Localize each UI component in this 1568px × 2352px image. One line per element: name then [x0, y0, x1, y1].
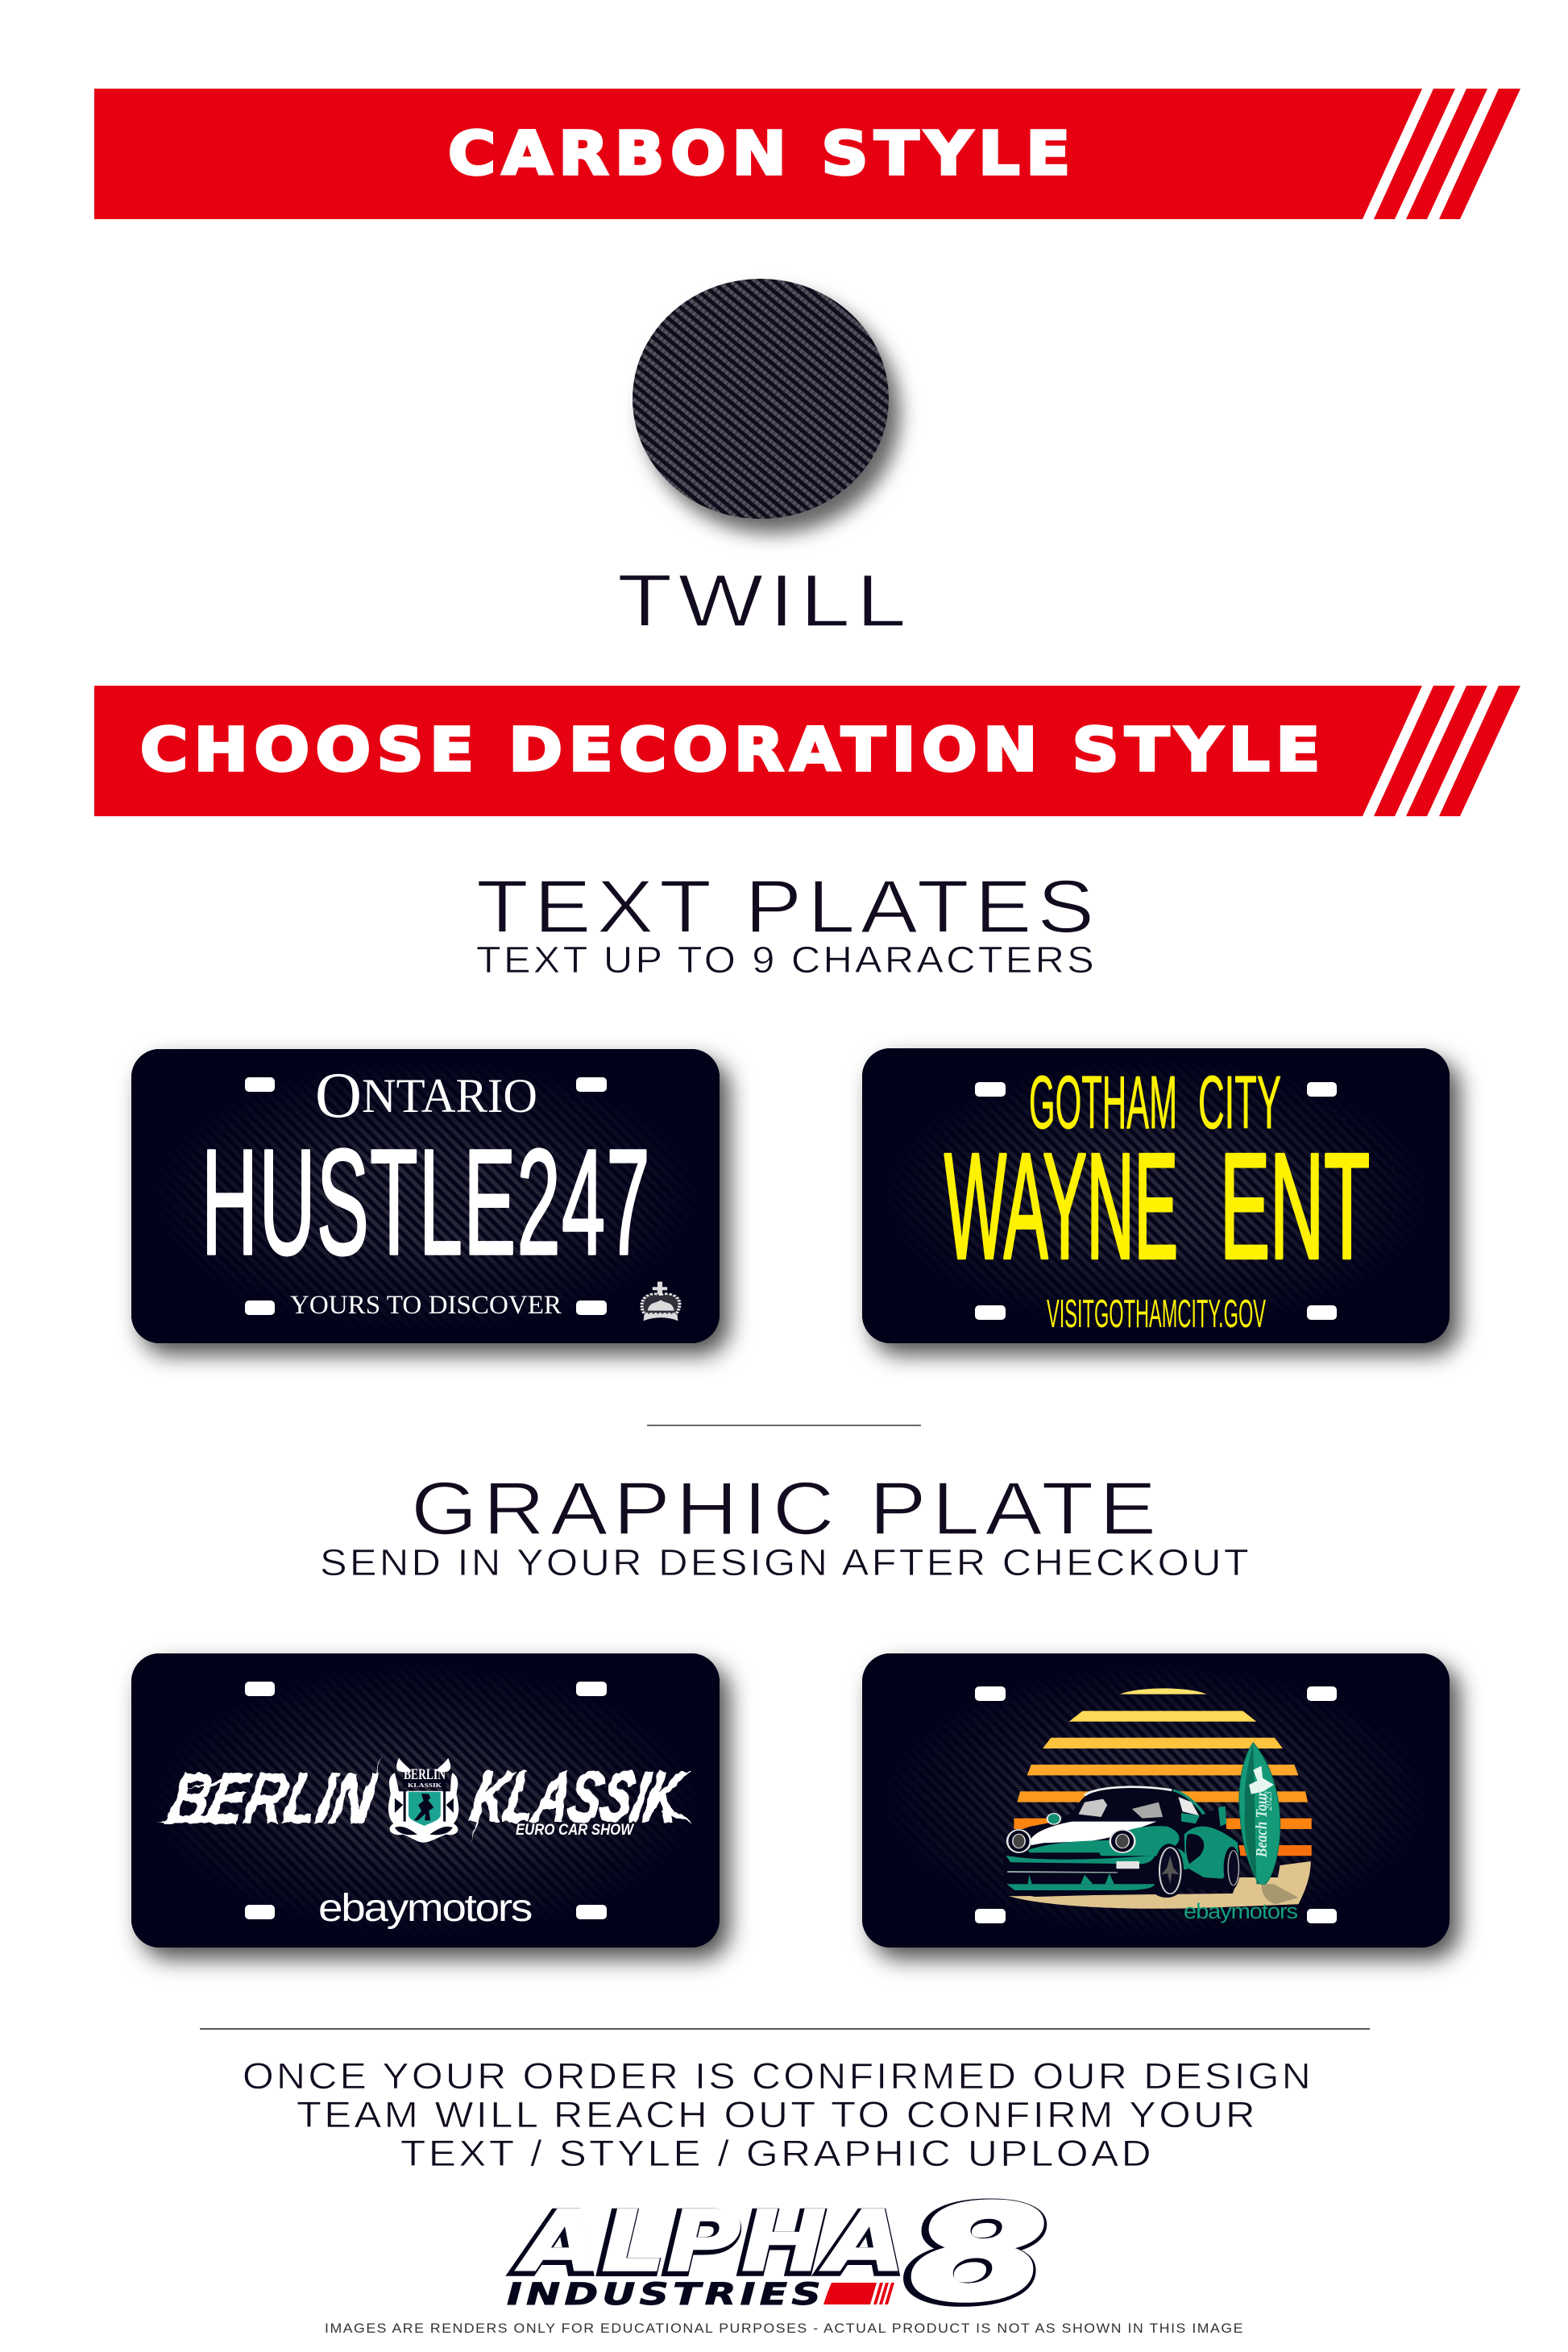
logo word: alpha: ALPHA	[515, 2192, 906, 2291]
heading: text plates: TEXT PLATES	[476, 865, 1100, 948]
mounting holes	[245, 1682, 607, 1919]
crest shield with bear	[408, 1791, 442, 1827]
logo word: industries: INDUSTRIES	[507, 2277, 825, 2312]
logo word outline: alpha: ALPHA	[512, 2195, 904, 2293]
divider	[647, 1425, 921, 1426]
banner: choose decoration style	[94, 686, 1520, 816]
mounting holes	[975, 1686, 1337, 1923]
line 3: TEXT / STYLE / GRAPHIC UPLOAD	[400, 2133, 1154, 2174]
crest name: BERLIN	[404, 1766, 446, 1783]
crest subname: KLASSIK	[408, 1782, 442, 1789]
plate title: Ontario	[315, 1060, 537, 1131]
plate base	[862, 1653, 1450, 1948]
mounting holes	[245, 1077, 607, 1315]
logo text: Klassik: KLASSIK	[465, 1757, 692, 1836]
subheading: send in your design: SEND IN YOUR DESIGN AFTER CHECKOUT	[320, 1541, 1251, 1583]
plate base	[131, 1653, 720, 1948]
illustration: green sports car	[1003, 1786, 1240, 1898]
illustration: sand	[1009, 1861, 1311, 1909]
plate title: Gotham City: GOTHAM	[1029, 1060, 1177, 1144]
illustration: sunset stripes	[1014, 1688, 1312, 1856]
heading: graphic plate: GRAPHIC PLATE	[411, 1466, 1162, 1550]
texture vignette	[131, 1049, 720, 1343]
board shape	[1239, 1743, 1280, 1884]
banner heading: CARBON STYLE	[448, 119, 1076, 189]
banner: carbon style	[94, 89, 1520, 219]
sponsor: ebay motors: ebaymotors	[318, 1887, 532, 1930]
carbon texture	[131, 1049, 720, 1343]
plate title: Ontario: NTARIO	[362, 1069, 537, 1122]
banner shape	[94, 686, 1422, 816]
disclaimer: IMAGES ARE RENDERS ONLY FOR EDUCATIONAL PURPOSES - ACTUAL PRODUCT IS NOT AS SHOWN IN THIS IMAGE	[325, 2321, 1244, 2336]
plate base	[131, 1049, 720, 1343]
illustration: surfboard	[1239, 1743, 1280, 1884]
logo subtitle: euro car show: EURO CAR SHOW	[516, 1822, 635, 1839]
icon: crown	[642, 1282, 680, 1321]
plate base	[862, 1048, 1450, 1343]
carbon texture	[131, 1653, 720, 1948]
logo numeral outline: 8: 8	[906, 2180, 1047, 2332]
order note text	[243, 2055, 1313, 2174]
plate: Gotham City WAYNE ENT	[862, 1048, 1450, 1343]
logo red speed bar	[823, 2283, 894, 2304]
swatch label: twill: TWILL	[617, 560, 912, 642]
subheading: text up to 9 characters: TEXT UP TO 9 CHARACTERS	[476, 939, 1097, 981]
plate: Ontario HUSTLE247	[131, 1049, 720, 1343]
board text: beach tour: Beach Tour	[1253, 1791, 1271, 1858]
texture vignette	[862, 1048, 1450, 1343]
texture vignette	[862, 1653, 1450, 1948]
logo numeral: 8: 8	[910, 2178, 1048, 2330]
plate number: ENT	[1220, 1123, 1370, 1290]
line 2: TEAM WILL REACH OUT TO CONFIRM YOUR	[297, 2094, 1258, 2135]
board text: year: 2023	[1262, 1791, 1274, 1811]
carbon texture	[862, 1048, 1450, 1343]
logo text: Klassik	[465, 1757, 693, 1843]
logo crest	[388, 1758, 458, 1843]
plate: Gotham City WAYNE ENT: VISITGOTHAMCITY.GOV	[1047, 1292, 1266, 1336]
logo text: Berlin: BERLIN	[163, 1758, 383, 1838]
divider	[200, 2028, 1370, 2030]
crest ornaments	[388, 1758, 458, 1843]
banner speed stripes	[1374, 686, 1520, 816]
plate: sunset car graphic	[862, 1653, 1450, 1948]
line 1: ONCE YOUR ORDER IS CONFIRMED OUR DESIGN	[243, 2055, 1313, 2097]
mounting holes	[975, 1082, 1337, 1320]
logo: Alpha 8 Industries	[507, 2178, 1048, 2332]
plate: Gotham City WAYNE ENT: CITY	[1198, 1060, 1281, 1144]
plate: Berlin Klassik graphic	[131, 1653, 720, 1948]
swatch: twill carbon fibre circle	[633, 279, 889, 519]
banner shape	[94, 89, 1422, 219]
plate number: HUSTLE247	[201, 1119, 651, 1286]
plate number: WAYNE	[944, 1123, 1178, 1290]
banner speed stripes	[1374, 89, 1520, 219]
banner heading: CHOOSE DECORATION STYLE	[140, 716, 1326, 785]
plate title: Ontario: O	[315, 1060, 362, 1131]
carbon texture	[862, 1653, 1450, 1948]
texture vignette	[131, 1653, 720, 1948]
sponsor: ebay motors: ebaymotors	[1184, 1899, 1298, 1923]
plate slogan: YOURS TO DISCOVER	[290, 1291, 562, 1320]
